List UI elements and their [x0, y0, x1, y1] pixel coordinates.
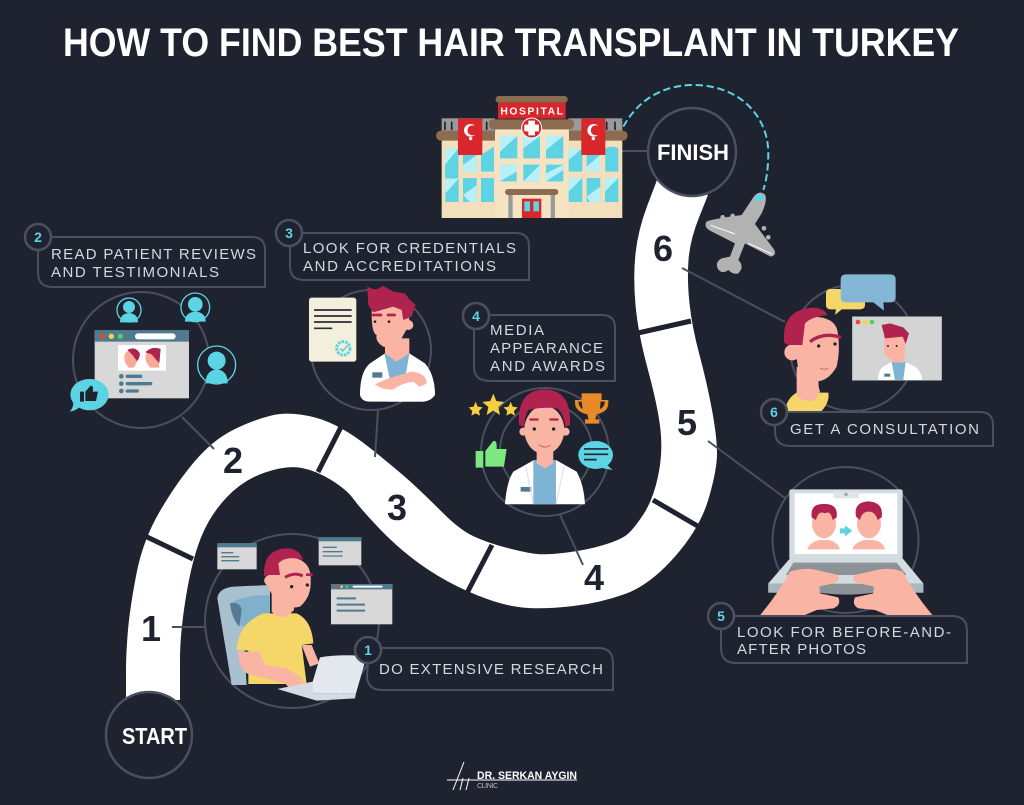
finish marker: FINISH	[657, 140, 729, 165]
illustration: browser with reviews	[70, 293, 236, 412]
winding road	[126, 180, 717, 700]
illustration ring	[311, 290, 431, 410]
callout label 2: READ PATIENT REVIEWS	[51, 246, 256, 263]
start marker	[106, 692, 192, 778]
logo: DR. SERKAN AYGIN	[477, 770, 577, 782]
icon: airplane	[706, 193, 775, 274]
step 1 number badge: 1	[364, 642, 372, 658]
step 1 number badge	[355, 637, 381, 663]
illustration: laptop with photos	[760, 489, 933, 615]
connector lines	[172, 151, 785, 627]
illustration: man at laptop	[217, 537, 392, 701]
callout label 3	[276, 220, 529, 280]
callout label 1	[367, 648, 613, 690]
callout label 4: AND AWARDS	[490, 358, 605, 375]
callout label 1: DO EXTENSIVE RESEARCH	[379, 661, 603, 678]
callout label 6: GET A CONSULTATION	[790, 421, 979, 438]
step numbers on the road: 6	[653, 228, 673, 269]
callout label 5: LOOK FOR BEFORE-AND-	[737, 624, 951, 641]
illustration ring	[772, 467, 918, 613]
illustration: hospital building	[436, 96, 628, 218]
callout label 5: 5	[717, 608, 725, 624]
finish marker	[648, 108, 736, 196]
callout label 3: LOOK FOR CREDENTIALS	[303, 240, 516, 257]
panel: step 2 reviews	[25, 224, 265, 428]
step numbers on the road: 2	[223, 440, 243, 481]
step numbers on the road: 1	[141, 608, 161, 649]
illustration: hospital building: HOSPITAL	[500, 107, 563, 118]
flight path	[623, 85, 768, 190]
panel: step 4 media	[463, 303, 615, 516]
panel: step 5 before and after	[708, 467, 967, 663]
illustration ring	[790, 285, 916, 411]
callout label 6: 6	[770, 404, 778, 420]
step numbers on the road: 3	[387, 487, 407, 528]
step numbers on the road: 5	[677, 402, 697, 443]
callout label 3: AND ACCREDITATIONS	[303, 258, 496, 275]
illustration: doctor with awards	[469, 389, 613, 504]
callout label 5: AFTER PHOTOS	[737, 641, 866, 658]
start marker: START	[122, 723, 187, 749]
callout label 4	[463, 303, 615, 381]
step numbers on the road: 4	[584, 557, 604, 598]
callout label 4: MEDIA	[490, 322, 544, 339]
illustration ring	[205, 534, 379, 708]
panel: step 1 research	[205, 534, 613, 708]
step numbers on the road	[141, 228, 697, 649]
illustration rings	[481, 388, 609, 516]
callout label 2: AND TESTIMONIALS	[51, 264, 219, 281]
panel: step 6 consultation	[761, 274, 993, 446]
callout label 3: 3	[285, 225, 293, 241]
illustration: doctor with certificate	[309, 286, 435, 402]
callout label 2	[25, 224, 265, 287]
callout label 5	[708, 603, 967, 663]
panel: step 3 credentials	[276, 220, 529, 410]
callout label 6	[761, 399, 993, 446]
illustration ring	[73, 292, 209, 428]
callout label 2: 2	[34, 229, 42, 245]
illustration: patient on video call	[784, 274, 942, 411]
callout label 4: APPEARANCE	[490, 340, 603, 357]
logo	[447, 762, 577, 790]
callout label 4: 4	[472, 308, 480, 324]
logo: CLINIC	[477, 783, 498, 790]
